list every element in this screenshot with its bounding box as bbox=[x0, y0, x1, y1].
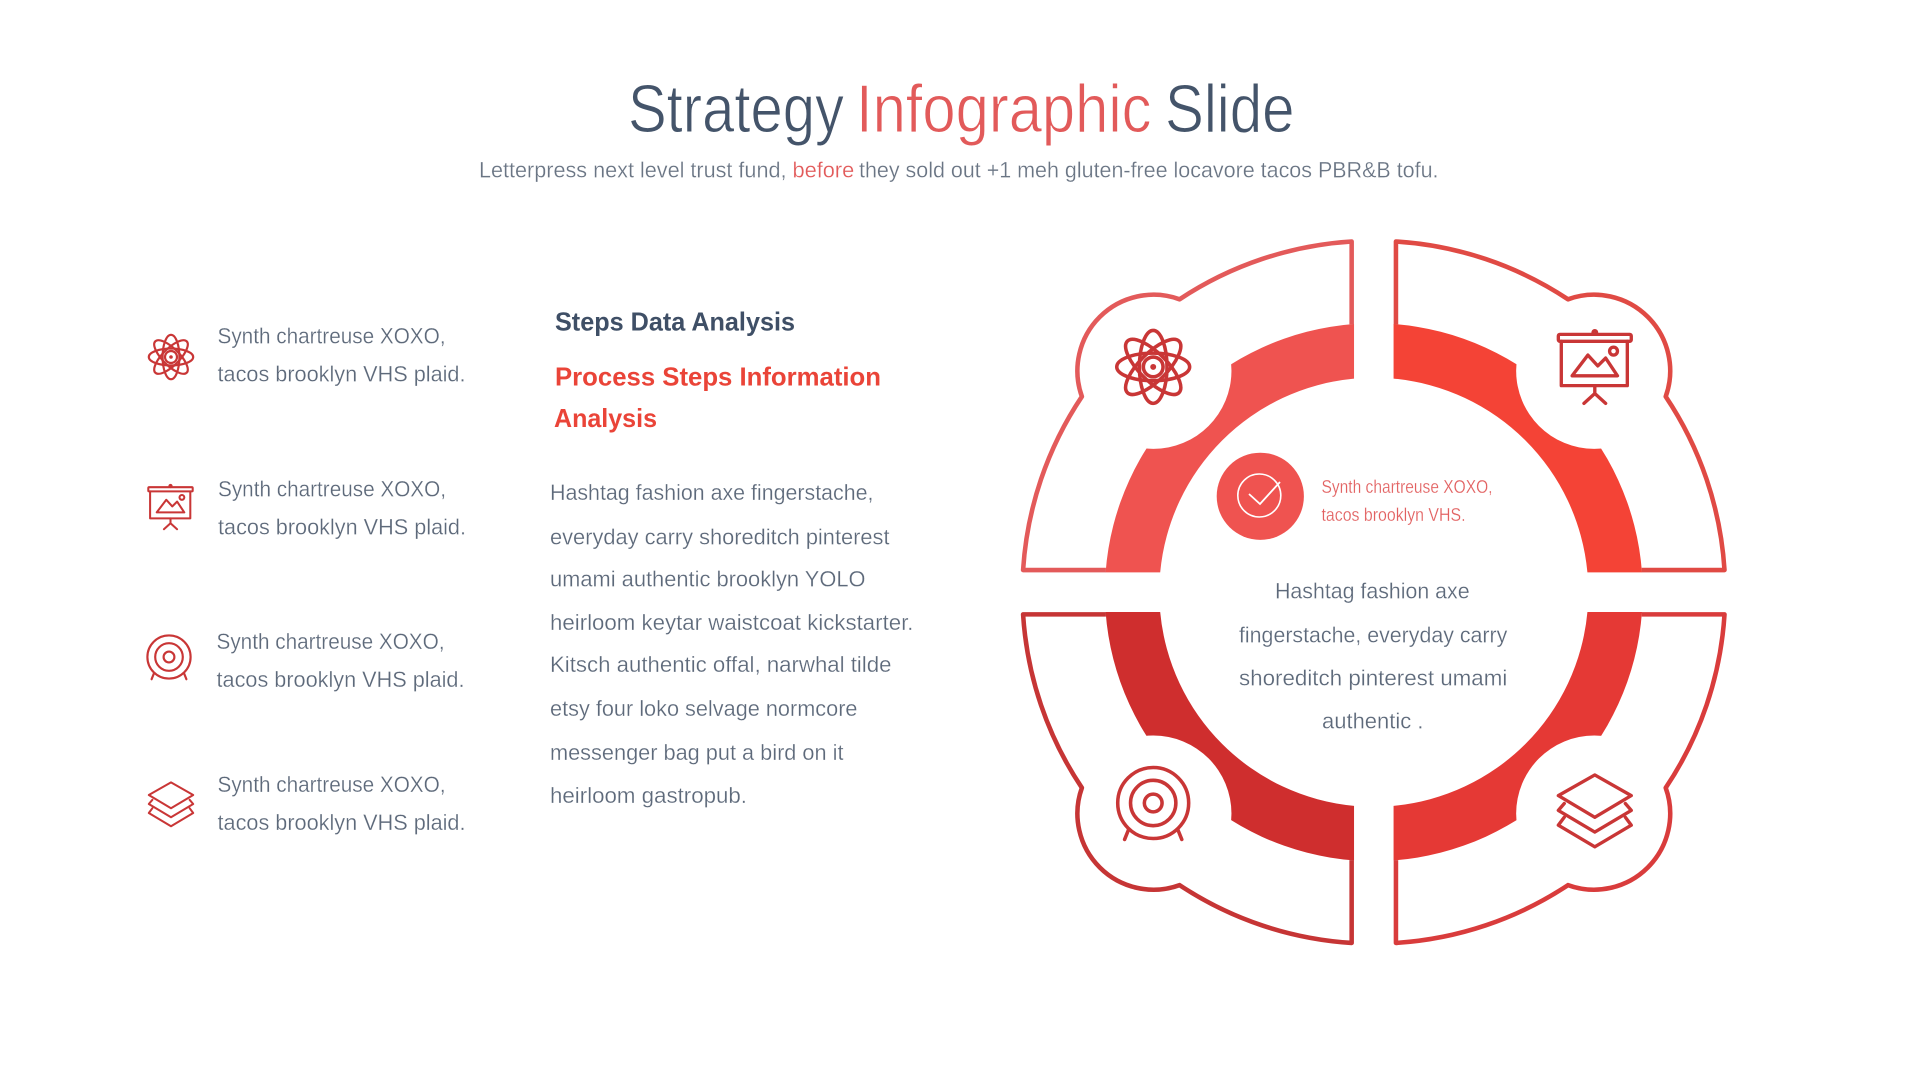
text block: paragraph: everyday carry shoreditch pinterest bbox=[550, 524, 890, 549]
text block: center: fingerstache, everyday carry bbox=[1239, 622, 1507, 647]
text block: paragraph: etsy four loko selvage normcore bbox=[550, 696, 858, 721]
text block: center: authentic . bbox=[1322, 708, 1424, 733]
title bbox=[628, 71, 1294, 147]
subtitle: Letterpress next level trust fund, bbox=[479, 158, 786, 182]
list item 2: tacos brooklyn VHS plaid. bbox=[218, 514, 466, 540]
icon: target bbox=[147, 635, 191, 679]
heading: process steps bbox=[554, 362, 881, 433]
segment: top left bbox=[1023, 241, 1354, 572]
icon: target large bbox=[1118, 768, 1189, 839]
list item 4: tacos brooklyn VHS plaid. bbox=[218, 810, 466, 835]
title: Strategy bbox=[628, 71, 844, 147]
icon: atom large bbox=[1117, 330, 1190, 403]
subtitle: they sold out +1 meh gluten-free locavore tacos PBR&B tofu. bbox=[859, 158, 1438, 182]
list item 1 bbox=[149, 324, 466, 386]
list item 2 bbox=[148, 476, 466, 540]
segment: bottom left bbox=[1023, 612, 1354, 943]
text block: paragraph: heirloom gastropub. bbox=[550, 783, 747, 808]
list item 1: tacos brooklyn VHS plaid. bbox=[218, 362, 466, 386]
text block: paragraph: Hashtag fashion axe fingerstache, bbox=[550, 480, 874, 505]
text block: paragraph: messenger bag put a bird on it bbox=[550, 740, 844, 765]
title: Slide bbox=[1165, 71, 1294, 147]
segment: top right bbox=[1394, 241, 1725, 572]
icon: layers bbox=[149, 782, 193, 826]
heading: process steps: Analysis bbox=[554, 403, 657, 433]
callout text: Synth chartreuse XOXO, bbox=[1322, 477, 1492, 497]
icon: layers large bbox=[1558, 775, 1631, 847]
text block: paragraph bbox=[550, 480, 914, 808]
list item 2: Synth chartreuse XOXO, bbox=[218, 476, 446, 502]
text block: paragraph: heirloom keytar waistcoat kickstarter. bbox=[550, 610, 914, 635]
text block: center: shoreditch pinterest umami bbox=[1239, 665, 1507, 690]
list item 3: tacos brooklyn VHS plaid. bbox=[216, 667, 464, 692]
panel: left icon list bbox=[147, 324, 466, 835]
text block: center: Hashtag fashion axe bbox=[1275, 578, 1470, 603]
subtitle: before bbox=[792, 158, 854, 182]
list item 3: Synth chartreuse XOXO, bbox=[216, 629, 444, 654]
text block: paragraph: umami authentic brooklyn YOLO bbox=[550, 566, 866, 592]
heading: steps data analysis: Steps Data Analysis bbox=[555, 306, 795, 336]
subtitle bbox=[479, 158, 1438, 182]
title: Infographic bbox=[856, 71, 1152, 147]
list item 4 bbox=[149, 772, 466, 835]
list item 3 bbox=[147, 629, 464, 692]
list item 1: Synth chartreuse XOXO, bbox=[218, 324, 446, 348]
callout text bbox=[1322, 477, 1492, 525]
callout text: tacos brooklyn VHS. bbox=[1322, 505, 1466, 525]
icon: check badge bbox=[1217, 453, 1304, 540]
list item 4: Synth chartreuse XOXO, bbox=[218, 772, 446, 797]
icon: presentation board bbox=[148, 485, 193, 529]
text block: paragraph: Kitsch authentic offal, narwhal tilde bbox=[550, 652, 892, 677]
heading: process steps: Process Steps Information bbox=[555, 362, 881, 392]
segment: bottom right bbox=[1394, 612, 1725, 943]
icon: presentation board large bbox=[1558, 331, 1631, 403]
chart: four-part ring bbox=[1023, 241, 1725, 943]
icon: atom bbox=[149, 335, 193, 379]
text block: center bbox=[1239, 578, 1507, 733]
